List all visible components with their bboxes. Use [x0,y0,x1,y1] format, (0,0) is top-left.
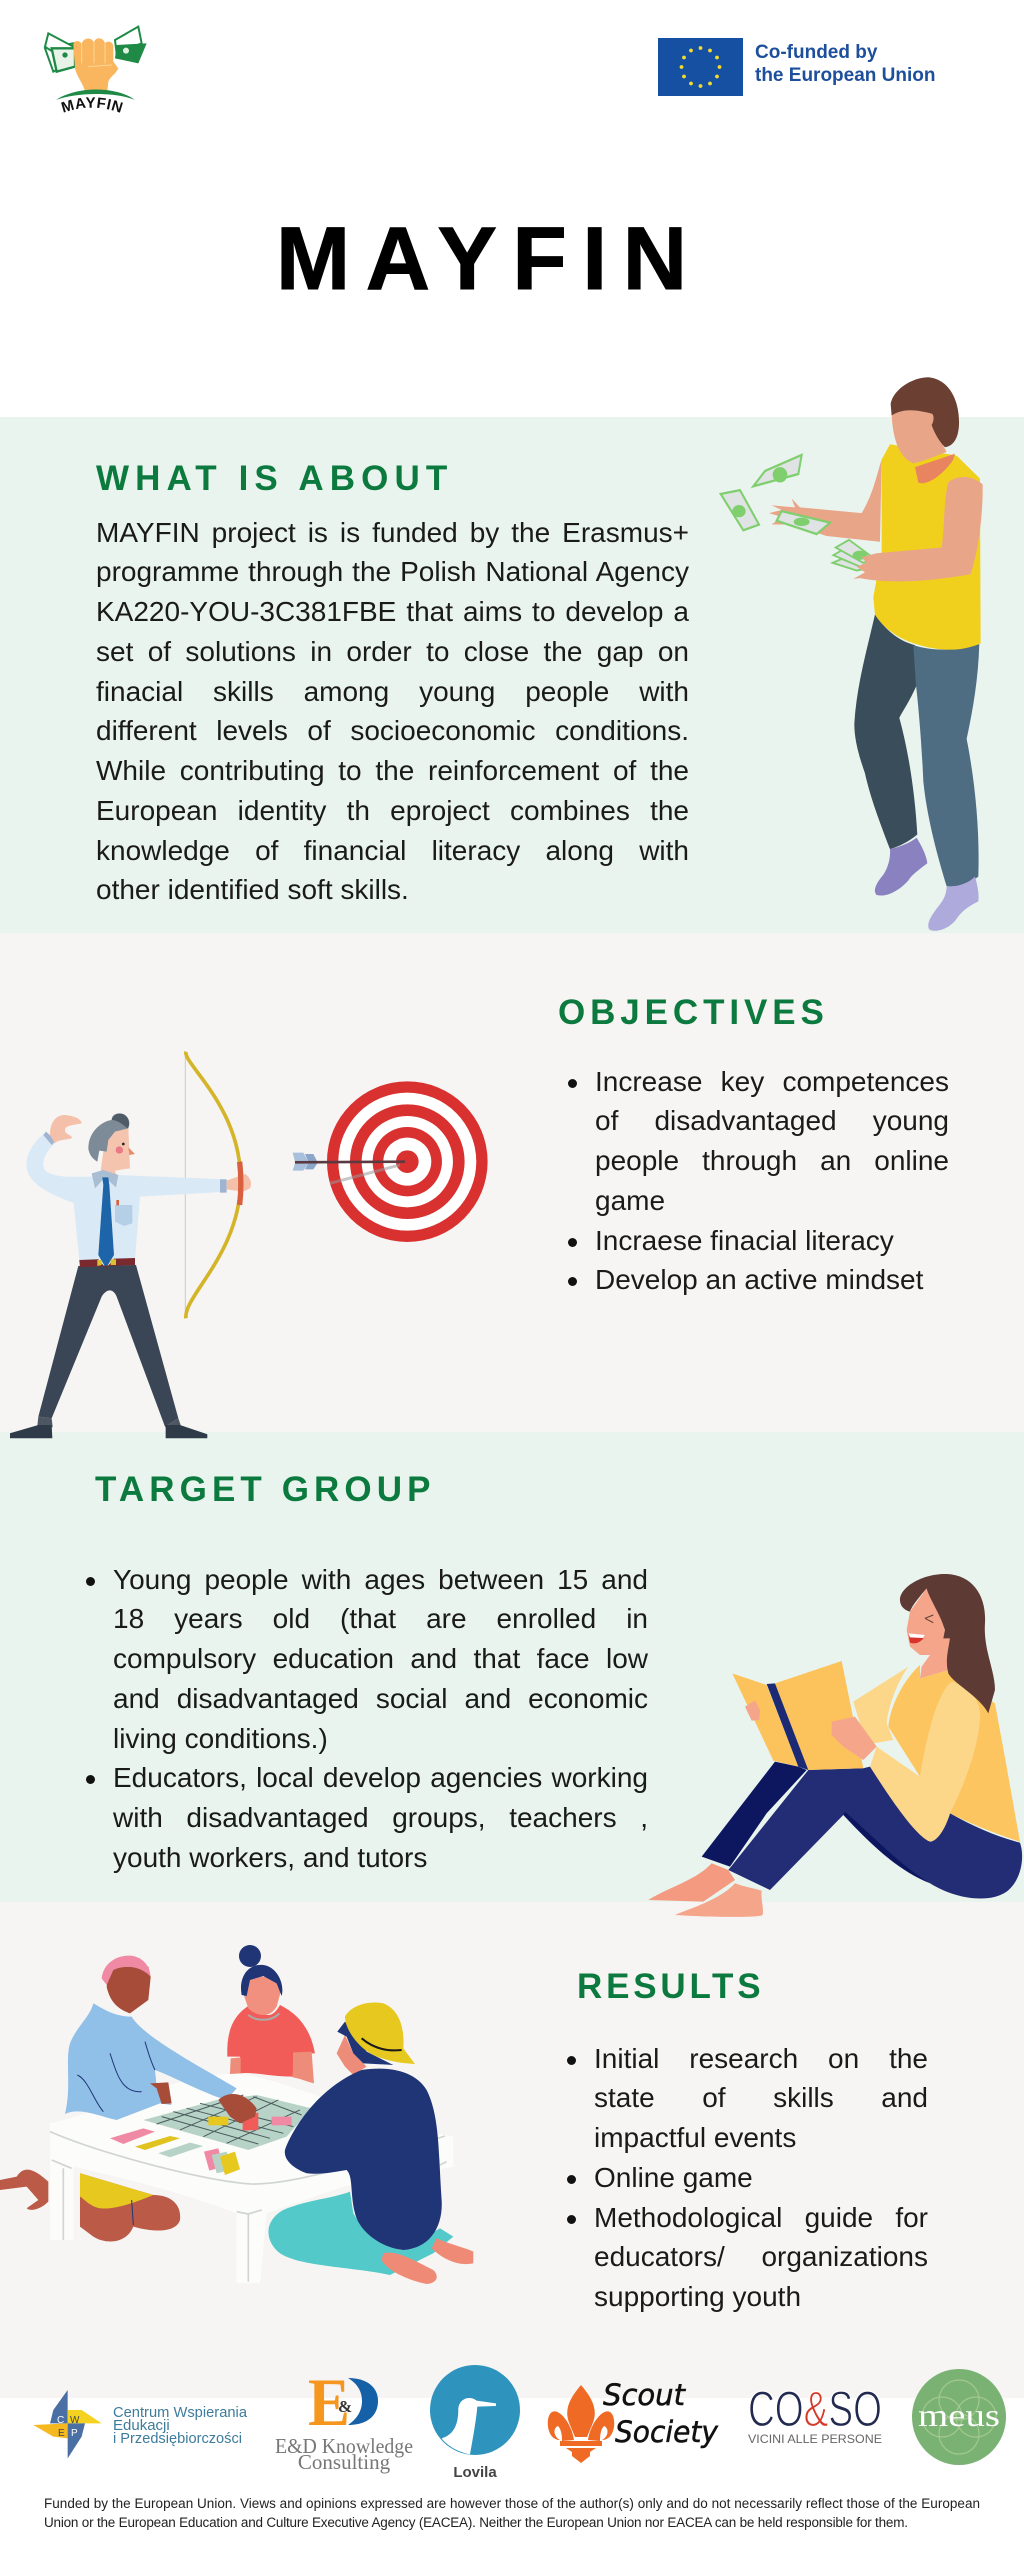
text block: project description [96,516,689,905]
text block: project description: While contributing to the reinforcement of the [96,755,689,786]
archer [10,1053,251,1438]
bullet list: target group: Educators, local develop agencies working [113,1762,648,1793]
player: left with blue sweater [0,1956,257,2242]
bullet list: target group: and disadvantaged social and economic [113,1683,648,1714]
text block: project description: KA220-YOU-3C381FBE that aims to develop a [96,596,689,627]
player: right with yellow hat [268,2002,473,2284]
bullet list: target group: living conditions.) [113,1722,328,1754]
bullet list: results [567,2042,928,2312]
text block: project description: MAYFIN project is is funded by the Erasmus+ [96,516,689,548]
bullet list: objectives: game [595,1185,665,1216]
logo: E&D Knowledge Consulting: Consulting [298,2450,391,2474]
logo: CWEP: E [58,2428,65,2439]
illustration: archer and target [10,1051,488,1438]
logo: meus [912,2369,1006,2465]
bullet list: objectives: Increase key competences [595,1066,949,1096]
panel: what is about [0,417,1024,933]
text block: project description: different levels of socioeconomic conditions. [96,715,689,746]
bullet list: objectives: Incraese finacial literacy [595,1224,894,1256]
EU statement [755,42,936,86]
icon: EU flag [658,38,743,96]
bullet list: target group: 18 years old (that are enrolled in [113,1603,648,1634]
funding disclaimer [44,2496,980,2530]
text block: project description: knowledge of financial literacy along with [96,834,689,866]
heading: OBJECTIVES [558,993,829,1032]
logo: CWEP: Edukacji [113,2417,170,2434]
EU statement: Co-funded by [755,42,877,63]
logo: CO&SO: VICINI ALLE PERSONE [748,2432,882,2446]
bullet list: target group: youth workers, and tutors [113,1842,427,1873]
logo: CWEP: P [71,2428,78,2439]
heading: RESULTS [577,1967,764,2006]
logo: CWEP: W [70,2415,80,2426]
bullet list: results: impactful events [594,2122,796,2153]
logo: CWEP [33,2390,248,2458]
logo: Scout Society [548,2378,719,2463]
bullet list: objectives: Develop an active mindset [595,1264,923,1295]
bullet list: target group [86,1564,648,1873]
bullet list: results: supporting youth [594,2281,801,2312]
bow [186,1052,241,1318]
bullet list: objectives: people through an online [595,1145,949,1176]
logo: CO&SO: CO&SO [748,2381,882,2437]
panel: objectives [0,933,1024,1432]
illustration: woman reading a book [648,1574,1022,1917]
bullet list: results: Online game [594,2162,753,2193]
text block: project description: programme through the Polish National Agency [96,556,689,587]
logo: MAYFIN fist with banknotes [44,25,147,113]
bullet list: results: Methodological guide for [594,2202,928,2232]
panel: results [0,1902,1024,2398]
title: MAYFIN [276,208,703,308]
logo: Scout Society: Society [615,2415,719,2449]
funding disclaimer: Union or the European Education and Culture Executive Agency (EACEA). Neither the European Union nor EACEA can be held responsible for them. [44,2515,908,2530]
logo: MAYFIN fist with banknotes: MAYFIN [61,97,123,113]
logo: E&D Knowledge Consulting: & [338,2397,352,2416]
text block: project description: other identified soft skills. [96,874,409,905]
bullet list: target group: Young people with ages between 15 and [113,1564,648,1594]
logo: meus: meus [918,2397,1000,2433]
panel: target group [0,1432,1024,1902]
arrow [293,1153,405,1171]
logo: E&D Knowledge Consulting: E [308,2364,350,2440]
partner logos row [34,2364,1006,2481]
logo: Lovila: Lovila [453,2464,497,2481]
text block: project description: European identity th eproject combines the [96,795,689,826]
EU statement: the European Union [755,65,936,86]
player: middle in coral shirt [227,1945,315,2083]
logo: CWEP: i Przedsiębiorczości [113,2430,242,2447]
logo: E&D Knowledge Consulting: E&D Knowledge [275,2434,413,2458]
funding disclaimer: Funded by the European Union. Views and opinions expressed are however those of the author(s) only and do not necessarily reflect those of the European [44,2496,980,2511]
text block: project description: finacial skills among young people with [96,676,689,706]
logo: E&D Knowledge Consulting [275,2364,413,2474]
bullet list: target group: with disadvantaged groups, teachers , [113,1802,648,1833]
target [327,1081,488,1242]
bullet list: results: state of skills and [594,2082,928,2113]
logo: Scout Society: Scout [603,2378,687,2412]
heading: TARGET GROUP [95,1470,436,1509]
table [50,2073,453,2283]
logo: Lovila [430,2365,520,2481]
logo: EU flag with co-funding statement [658,38,936,96]
bullet list: objectives [568,1066,949,1295]
logo: CWEP: Centrum Wspierania [113,2404,248,2421]
bullet list: results: Initial research on the [594,2042,928,2074]
board [110,2095,312,2175]
bullet list: objectives: of disadvantaged young [595,1105,949,1136]
heading: WHAT IS ABOUT [96,459,453,498]
text block: project description: set of solutions in order to close the gap on [96,636,689,667]
logo: CWEP: C [57,2415,64,2426]
bullet list: results: educators/ organizations [594,2241,928,2272]
illustration: three people playing a board game [0,1945,474,2284]
bullet list: target group: compulsory education and that face low [113,1643,648,1674]
illustration: man throwing banknotes [719,377,983,931]
